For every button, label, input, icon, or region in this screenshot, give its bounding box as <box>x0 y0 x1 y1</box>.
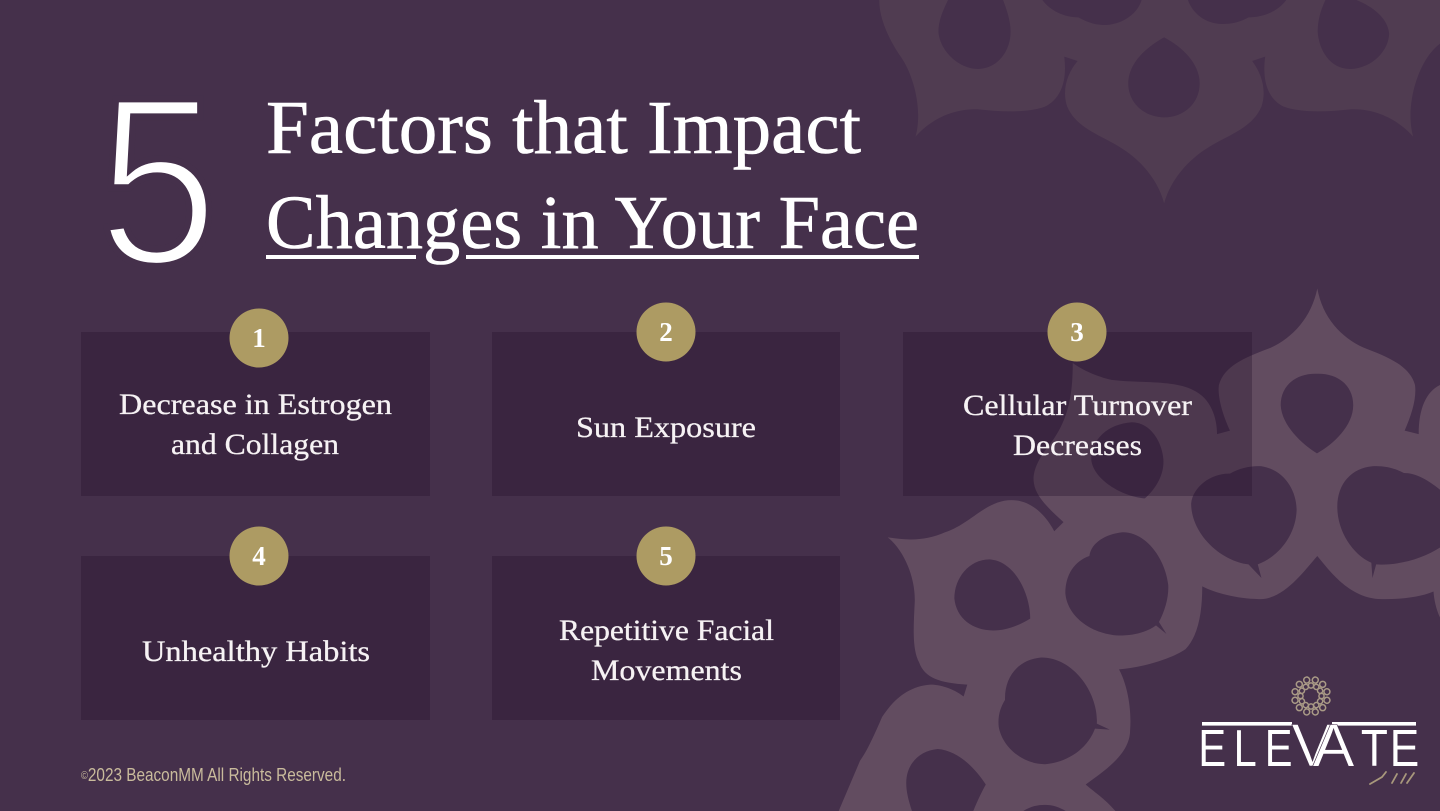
card 3: 3 <box>1070 317 1084 347</box>
logo: Elevate: TE <box>1361 720 1419 778</box>
background ornament: lower right <box>834 288 1440 811</box>
card 4 <box>81 526 430 720</box>
card 5: 5 <box>659 541 673 571</box>
card 2: 2 <box>659 317 673 347</box>
card 1: 1 <box>252 323 266 353</box>
card 3 <box>903 302 1252 496</box>
card 5: Repetitive Facial <box>559 614 774 647</box>
card 2: Sun Exposure <box>576 411 756 444</box>
icon: gold mandala <box>1291 676 1331 716</box>
card 1: and Collagen <box>171 428 339 461</box>
big number 5: 5 <box>98 47 218 315</box>
card 5 <box>492 526 840 720</box>
card 2 <box>492 302 840 496</box>
icon: gold signature <box>1370 772 1414 784</box>
copyright footer: 2023 BeaconMM All Rights Reserved. <box>88 765 346 785</box>
title: Changes in Your Face <box>266 181 919 265</box>
title: Factors that Impact <box>266 86 861 170</box>
background ornament: top <box>879 0 1440 203</box>
title <box>266 86 919 265</box>
logo: Elevate <box>1198 676 1419 784</box>
card 1 <box>81 308 430 496</box>
card 3: Cellular Turnover <box>963 389 1192 422</box>
logo: Elevate: VA <box>1291 712 1355 780</box>
copyright footer: © <box>81 770 88 782</box>
logo: Elevate: ELE <box>1198 719 1293 777</box>
card 3: Decreases <box>1013 429 1142 462</box>
card 1: Decrease in Estrogen <box>119 388 392 421</box>
card 4: 4 <box>252 541 266 571</box>
card 4: Unhealthy Habits <box>142 635 370 668</box>
card 5: Movements <box>591 654 742 687</box>
